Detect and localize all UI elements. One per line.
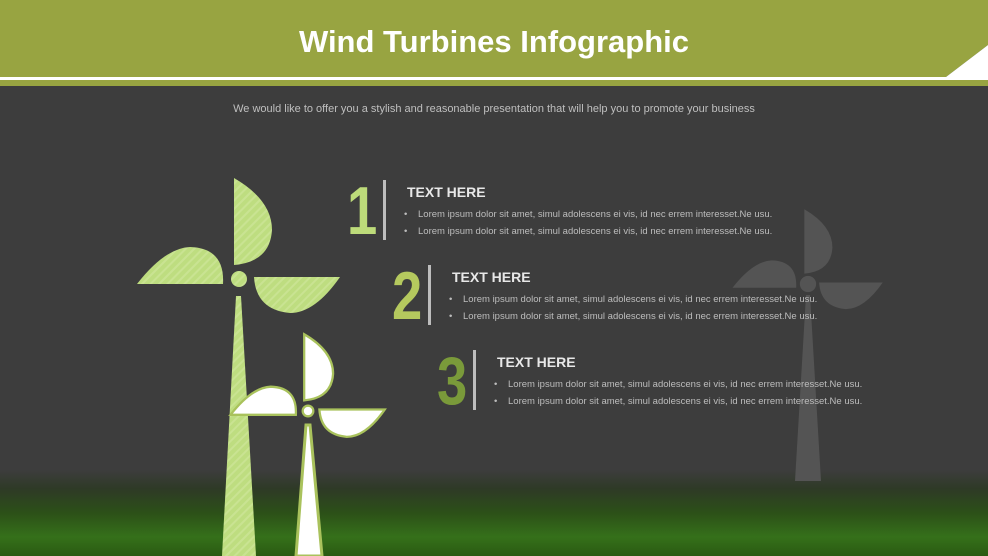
item 1: 1	[347, 173, 377, 249]
turbine: small white	[230, 334, 385, 556]
subtitle: We would like to offer you a stylish and reasonable presentation that will help you to promote your business	[233, 103, 755, 115]
header band	[0, 0, 988, 86]
item 3: 3	[437, 343, 467, 419]
item 2: Lorem ipsum dolor sit amet, simul adolescens ei vis, id nec errem interesset.Ne usu.	[463, 311, 817, 322]
item 3	[437, 343, 862, 419]
grass background	[0, 470, 988, 556]
item 1: Lorem ipsum dolor sit amet, simul adolescens ei vis, id nec errem interesset.Ne usu.	[418, 226, 772, 237]
item 1	[347, 173, 772, 249]
item 2	[392, 258, 817, 334]
item 2: TEXT HERE	[452, 269, 531, 285]
item 3: Lorem ipsum dolor sit amet, simul adolescens ei vis, id nec errem interesset.Ne usu.	[508, 379, 862, 390]
turbine: large green	[137, 178, 340, 556]
item 3: Lorem ipsum dolor sit amet, simul adolescens ei vis, id nec errem interesset.Ne usu.	[508, 396, 862, 407]
item 1: Lorem ipsum dolor sit amet, simul adolescens ei vis, id nec errem interesset.Ne usu.	[418, 209, 772, 220]
turbine: grey background	[733, 209, 883, 481]
item 1: TEXT HERE	[407, 184, 486, 200]
item 2: Lorem ipsum dolor sit amet, simul adolescens ei vis, id nec errem interesset.Ne usu.	[463, 294, 817, 305]
title: Wind Turbines Infographic	[299, 24, 689, 59]
item 3: TEXT HERE	[497, 354, 576, 370]
item 2: 2	[392, 258, 422, 334]
